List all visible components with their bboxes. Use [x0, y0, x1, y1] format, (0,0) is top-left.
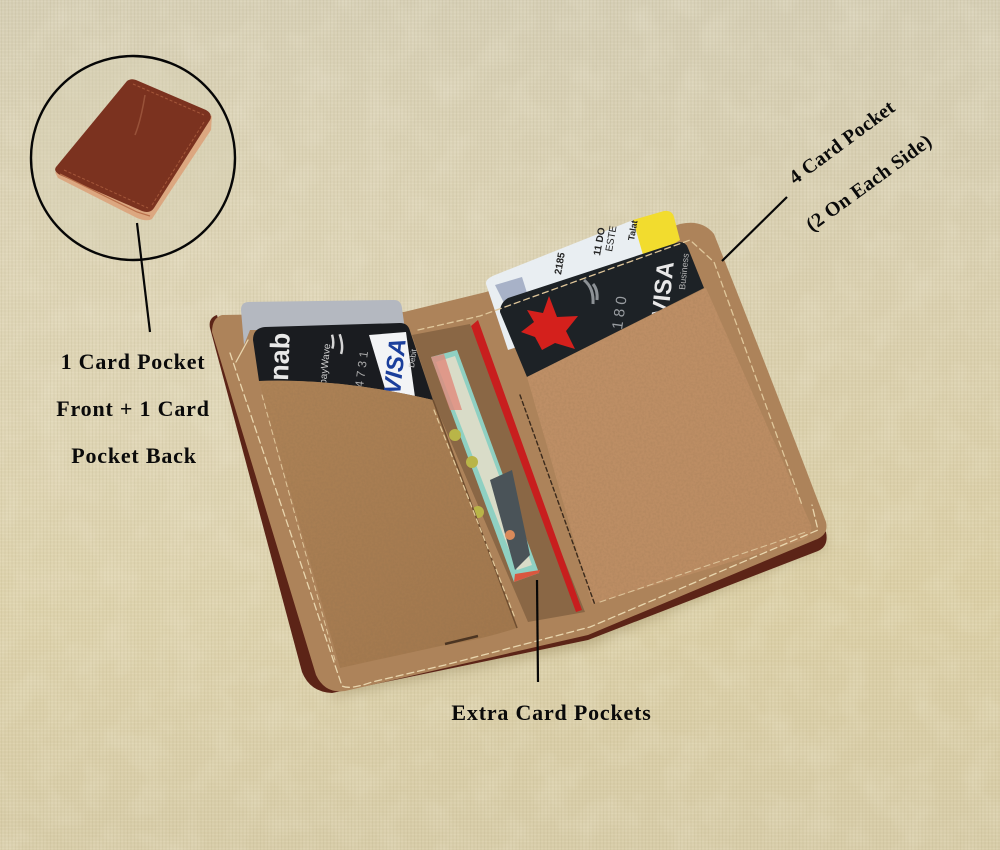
white licence card: 11 DO [592, 226, 608, 257]
label: card pocket front and back: Pocket Back [71, 443, 197, 468]
extra card pocket: banknote [431, 350, 540, 582]
label: card pocket front and back [56, 349, 210, 468]
black nab debit card: nab [264, 332, 296, 381]
stitching [230, 240, 818, 687]
black nab debit card: payWave [318, 343, 333, 385]
leader: inset to label [137, 223, 150, 332]
black nab debit card [253, 323, 433, 400]
black nab debit card: 4 7 3 1 [352, 350, 371, 388]
dark NAB business card: Business [677, 252, 691, 290]
dark NAB business card: VISA [647, 260, 680, 319]
open wallet [210, 211, 830, 693]
wallet shadow [325, 510, 828, 698]
label: 4 card pocket: 4 Card Pocket [785, 96, 899, 189]
circle inset: closed wallet [31, 56, 235, 260]
closed wallet icon [55, 79, 212, 220]
white licence card: ESTE [604, 225, 620, 253]
leader: 4 card pocket [722, 197, 787, 261]
left cards [241, 300, 433, 400]
black nab debit card: VISA [379, 337, 412, 396]
left front pocket [260, 380, 518, 668]
label: card pocket front and back: Front + 1 Card [56, 396, 210, 421]
white licence card: Talat [626, 220, 640, 241]
wallet centre recess [412, 324, 585, 622]
white licence card [486, 211, 680, 350]
right front pocket [527, 288, 811, 604]
extra card pocket: red card [471, 320, 582, 612]
right cards [486, 211, 704, 377]
white licence card: 2185 [553, 251, 568, 276]
NAB red star [521, 296, 578, 350]
grey card [241, 300, 405, 345]
label: card pocket front and back: 1 Card Pocket [61, 349, 205, 374]
leader: extra card pockets [537, 580, 538, 682]
label: extra card pockets: Extra Card Pockets [451, 700, 652, 725]
label: 4 card pocket: (2 On Each Side) [802, 130, 936, 236]
wallet outer dark edge [210, 315, 827, 693]
label: 4 card pocket [785, 96, 936, 236]
dark NAB business card: 1 8 0 [609, 295, 631, 331]
inset circle [31, 56, 235, 260]
black nab debit card: Debit [407, 348, 419, 368]
dark NAB business card [500, 242, 704, 377]
wallet lining body [212, 223, 827, 691]
